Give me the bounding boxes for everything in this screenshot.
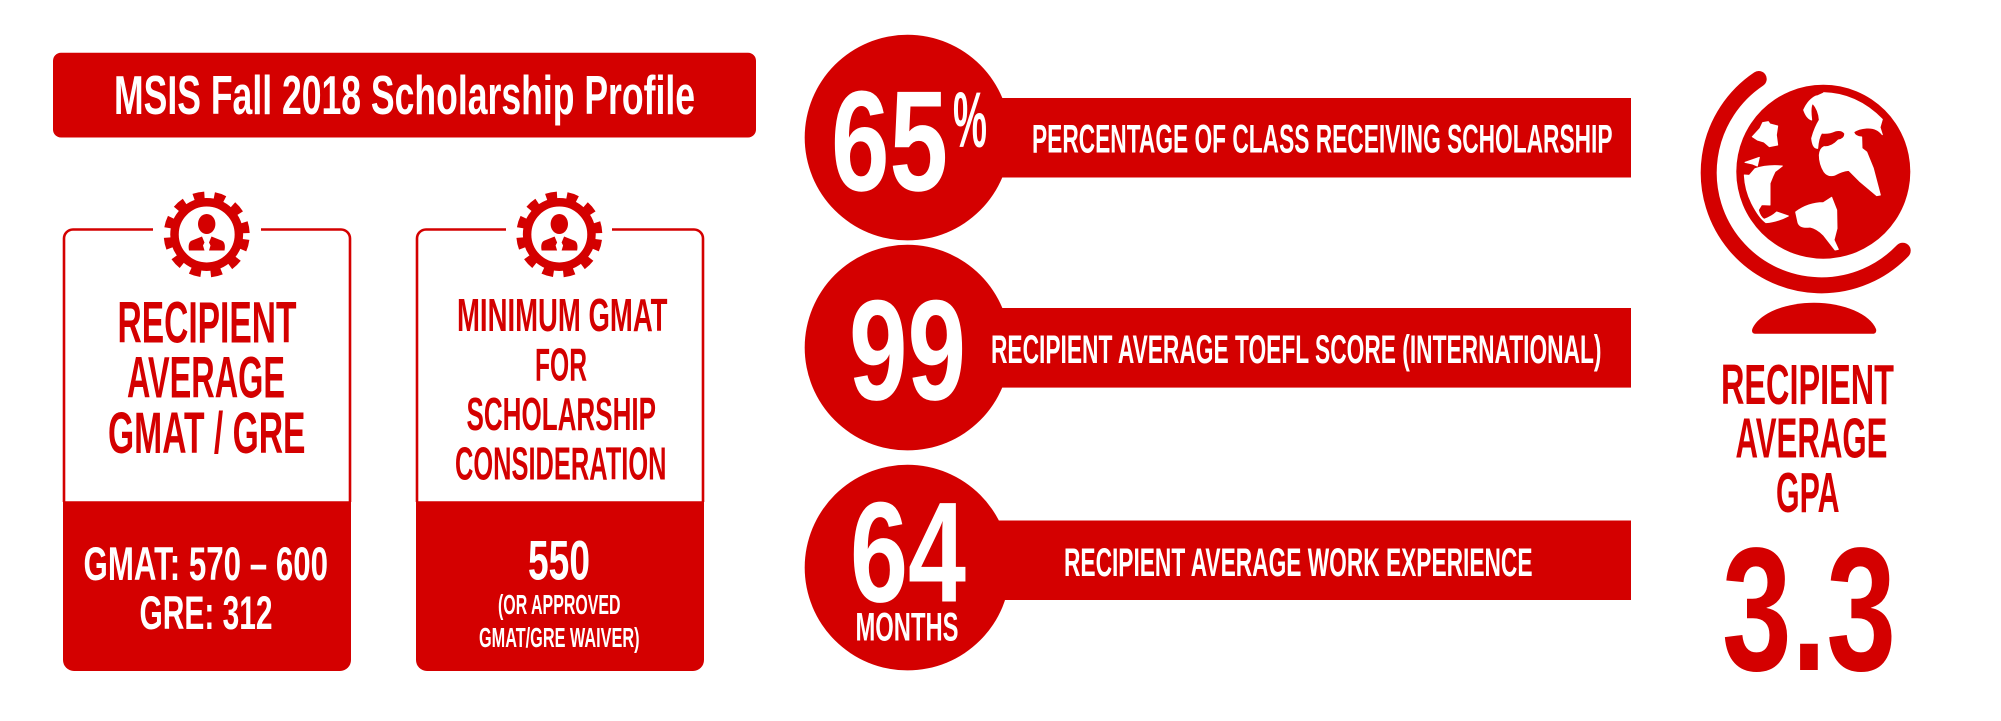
value: 550 or approved waiver [479, 528, 640, 653]
number: 99: 99 [849, 272, 966, 430]
heading: minimum GMAT for scholarship consideration [455, 289, 668, 490]
title text: MSIS Fall 2018 Scholarship Profile [114, 64, 695, 126]
value: 550 or approved waiver: 550 [528, 528, 590, 591]
heading: recipient average GPA [1721, 353, 1894, 525]
panel: recipient average GMAT / GRE [63, 195, 351, 671]
values: GMAT and GRE: GRE: 312 [140, 587, 272, 640]
number: 65%: 65 [831, 62, 948, 221]
heading: recipient average GMAT / GRE: AVERAGE [127, 346, 285, 411]
heading: minimum GMAT for scholarship consideration: FOR [535, 339, 587, 391]
number: 64 months: 64 [850, 474, 966, 632]
continents [1744, 93, 1882, 250]
heading: recipient average GMAT / GRE [108, 290, 306, 466]
heading: recipient average GPA: GPA [1776, 461, 1840, 525]
heading: minimum GMAT for scholarship consideration: CONSIDERATION [455, 438, 666, 490]
title banner [53, 53, 756, 137]
globe stand arc [1709, 79, 1903, 285]
stat: 64 months work experience [805, 465, 1631, 670]
icon: gear with person [520, 195, 599, 274]
icon: desk globe [1709, 79, 1910, 334]
number: 64 months [850, 474, 966, 650]
value: 550 or approved waiver: GMAT/GRE WAIVER) [479, 622, 640, 653]
stat: 65 percent of class receiving scholarship: % [953, 75, 987, 164]
value: 550 or approved waiver: (OR APPROVED [498, 589, 620, 620]
heading: recipient average GMAT / GRE: RECIPIENT [118, 290, 296, 356]
heading: minimum GMAT for scholarship consideration: SCHOLARSHIP [466, 388, 656, 440]
icon: gear with person [167, 195, 246, 274]
stat: 99 average TOEFL score [805, 245, 1631, 450]
heading: minimum GMAT for scholarship consideration: MINIMUM GMAT [457, 289, 668, 341]
globe sphere [1736, 85, 1910, 259]
heading: recipient average GMAT / GRE: GMAT / GRE [108, 401, 306, 466]
number: 64 months: MONTHS [856, 606, 958, 650]
stat: 65 percent of class receiving scholarship [805, 35, 1631, 240]
value: GPA 3.3: 3.3 [1722, 512, 1896, 708]
globe base [1752, 303, 1876, 334]
values: GMAT and GRE: GMAT: 570 – 600 [84, 538, 328, 591]
panel: minimum GMAT for scholarship consideration [416, 195, 704, 671]
label: RECIPIENT AVERAGE WORK EXPERIENCE [1064, 541, 1532, 585]
values: GMAT and GRE [84, 538, 328, 640]
